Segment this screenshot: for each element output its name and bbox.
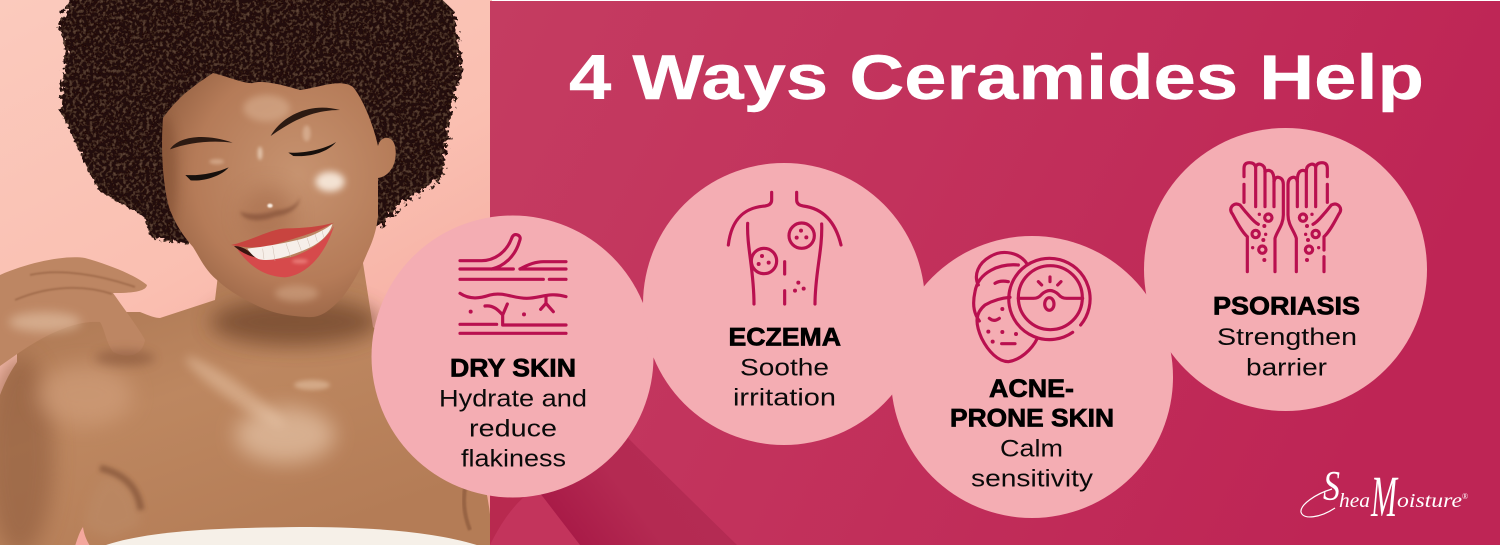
text: acne-prone skin benefit	[971, 436, 1094, 493]
text: psoriasis benefit	[1217, 324, 1357, 382]
logo: SheaMoisture	[1301, 464, 1468, 529]
facial features	[170, 95, 345, 301]
heading: dry skin: DRY SKIN	[450, 355, 576, 383]
icon: torso with patches	[728, 192, 841, 304]
white strapless top	[103, 527, 480, 545]
heading: acne-prone skin: PRONE SKIN	[950, 405, 1114, 433]
hand on shoulder	[0, 257, 155, 366]
logo: SheaMoisture: S	[1323, 464, 1340, 510]
text: eczema benefit: Soothe	[740, 354, 829, 382]
logo: SheaMoisture: M	[1370, 464, 1398, 529]
photo: smiling woman with glowing skin	[0, 0, 492, 545]
nose	[240, 197, 300, 220]
panel: dry skin	[372, 216, 654, 498]
logo: SheaMoisture: hea	[1339, 490, 1370, 512]
icon: cracked skin layers	[460, 235, 566, 333]
panel: eczema	[643, 163, 925, 445]
text: eczema benefit: irritation	[733, 385, 836, 412]
eyebrows	[170, 137, 233, 149]
face	[153, 73, 396, 317]
circle: dry skin	[372, 216, 654, 498]
heading: eczema: ECZEMA	[728, 324, 841, 352]
decorative bottle shape	[520, 415, 737, 545]
title: 4 Ways Ceramides Help	[569, 43, 1424, 113]
eyelashes	[185, 167, 229, 181]
text: dry skin benefit: flakiness	[461, 446, 566, 473]
text: dry skin benefit: reduce	[469, 416, 557, 443]
underarm	[84, 476, 140, 538]
text: psoriasis benefit: Strengthen	[1217, 324, 1357, 351]
circle: eczema	[643, 163, 925, 445]
icon: two hands with spots	[1231, 163, 1341, 272]
text: eczema benefit	[733, 354, 836, 412]
heading: psoriasis: PSORIASIS	[1213, 292, 1360, 320]
logo: SheaMoisture: oisture	[1397, 490, 1462, 512]
heading: acne-prone skin	[950, 375, 1114, 433]
text: psoriasis benefit: barrier	[1246, 355, 1327, 382]
panel: acne-prone skin	[891, 236, 1173, 518]
heading: acne-prone skin: ACNE-	[989, 375, 1074, 403]
text: dry skin benefit	[439, 386, 587, 473]
logo: SheaMoisture: ®	[1462, 492, 1468, 501]
panel: psoriasis	[1144, 128, 1427, 411]
hair	[58, 0, 462, 244]
icon: face with magnified pore	[974, 252, 1090, 362]
lips and teeth	[231, 223, 334, 247]
magenta background panel	[490, 1, 1500, 545]
circle: acne-prone skin	[891, 236, 1173, 518]
body: shoulders and chest	[0, 263, 492, 545]
text: dry skin benefit: Hydrate and	[439, 386, 587, 413]
text: acne-prone skin benefit: Calm	[1000, 436, 1063, 463]
circle: psoriasis	[1144, 128, 1427, 411]
text: acne-prone skin benefit: sensitivity	[971, 466, 1094, 493]
